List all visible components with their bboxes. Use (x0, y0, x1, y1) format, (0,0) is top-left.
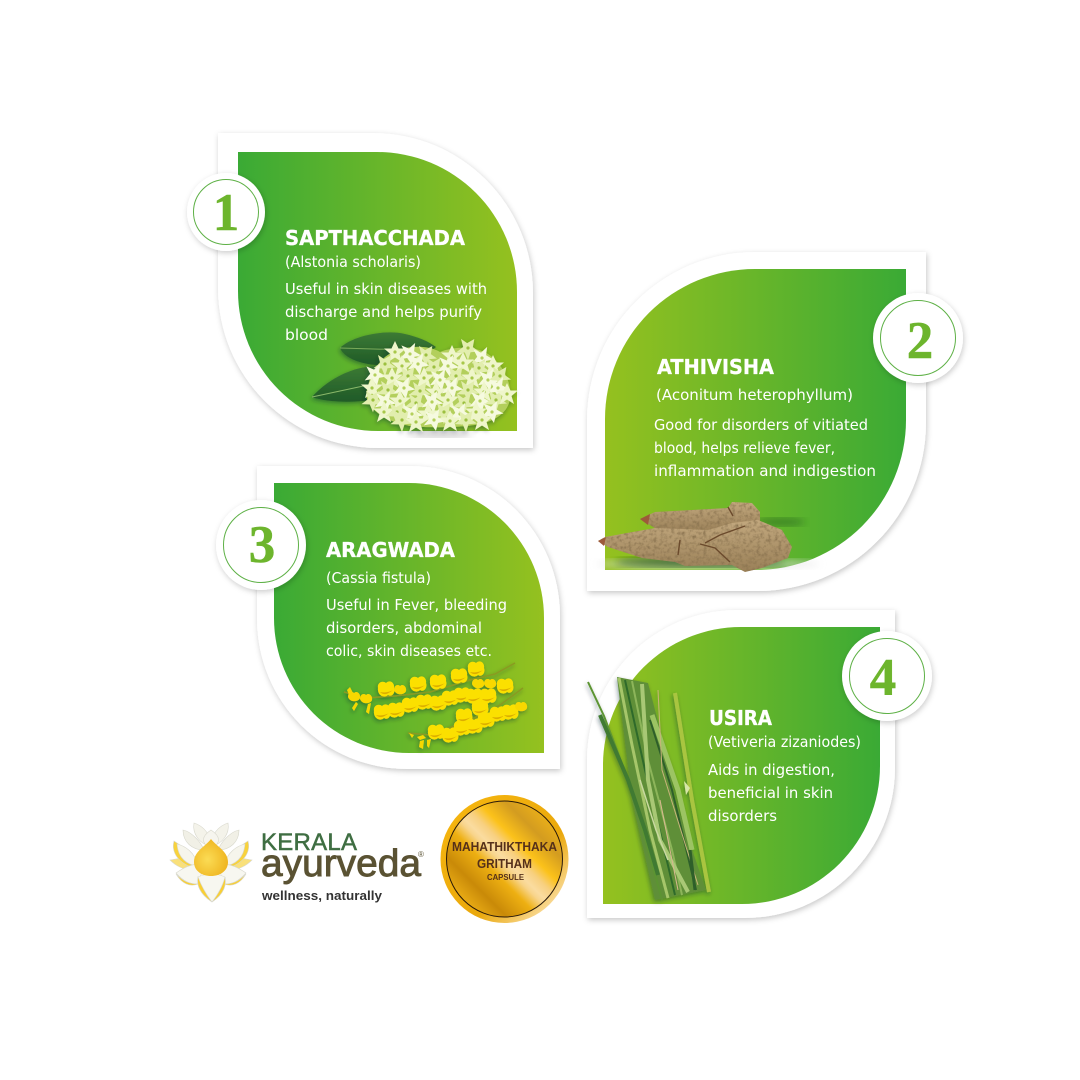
icon: athivisha roots (596, 502, 820, 572)
icon: cassia flowers (344, 661, 527, 749)
badge: product name: GRITHAM (477, 857, 532, 871)
heading: ATHIVISHA (657, 355, 774, 379)
description: colic, skin diseases etc. (326, 642, 492, 660)
badge: product name (440, 795, 568, 923)
description: disorders, abdominal (326, 619, 482, 637)
number badge 2: 2 (907, 312, 933, 370)
panel: Athivisha card (587, 252, 926, 591)
description: Useful in Fever, bleeding (326, 596, 507, 614)
card white frame (587, 252, 926, 591)
description: blood, helps relieve fever, (654, 439, 835, 457)
description (326, 596, 507, 660)
description: Aids in digestion, (708, 761, 835, 779)
description (708, 761, 835, 825)
icon: lotus (170, 823, 252, 902)
panel: Usira card (587, 610, 895, 918)
card green leaf shape (605, 269, 906, 570)
card white frame (257, 466, 560, 769)
icon: alstonia leaves and flowers (312, 332, 518, 437)
description: Useful in skin diseases with (285, 280, 487, 298)
number badge 4 (842, 631, 932, 721)
description: disorders (708, 807, 777, 825)
card white frame (587, 610, 895, 918)
card green leaf shape (603, 627, 880, 904)
card green leaf shape (238, 152, 517, 431)
logo: Kerala Ayurveda (170, 823, 424, 903)
icon: vetiver grass bundle (588, 677, 709, 900)
description: discharge and helps purify (285, 303, 482, 321)
botanical name: (Vetiveria zizaniodes) (708, 733, 861, 751)
description (654, 416, 876, 480)
heading: ARAGWADA (326, 538, 456, 562)
tagline: wellness, naturally (261, 889, 382, 903)
number badge 1: 1 (213, 184, 239, 242)
registered mark: ® (418, 850, 424, 859)
badge: product name: CAPSULE (487, 873, 525, 882)
card white frame (218, 133, 533, 448)
description: Good for disorders of vitiated (654, 416, 868, 434)
heading: USIRA (709, 706, 772, 730)
panel: Aragwada card (257, 466, 560, 769)
heading: SAPTHACCHADA (285, 226, 466, 250)
panel: Sapthacchada card (218, 133, 533, 448)
number badge 4: 4 (870, 649, 896, 707)
botanical name: (Alstonia scholaris) (285, 253, 421, 271)
description: inflammation and indigestion (654, 462, 876, 480)
description: beneficial in skin (708, 784, 833, 802)
number badge 3 (216, 500, 306, 590)
card green leaf shape (274, 483, 544, 753)
badge: product name: MAHATHIKTHAKA (452, 839, 558, 854)
botanical name: (Aconitum heterophyllum) (656, 386, 853, 404)
botanical name: (Cassia fistula) (326, 569, 431, 587)
wordmark ayurveda: ayurveda (261, 843, 422, 885)
wordmark KERALA: KERALA (261, 829, 357, 856)
description: blood (285, 326, 328, 344)
icon: lotus bud (194, 839, 228, 876)
number badge 2 (873, 293, 963, 383)
number badge 3: 3 (249, 516, 275, 574)
number badge 1 (187, 173, 265, 251)
description (285, 280, 487, 344)
